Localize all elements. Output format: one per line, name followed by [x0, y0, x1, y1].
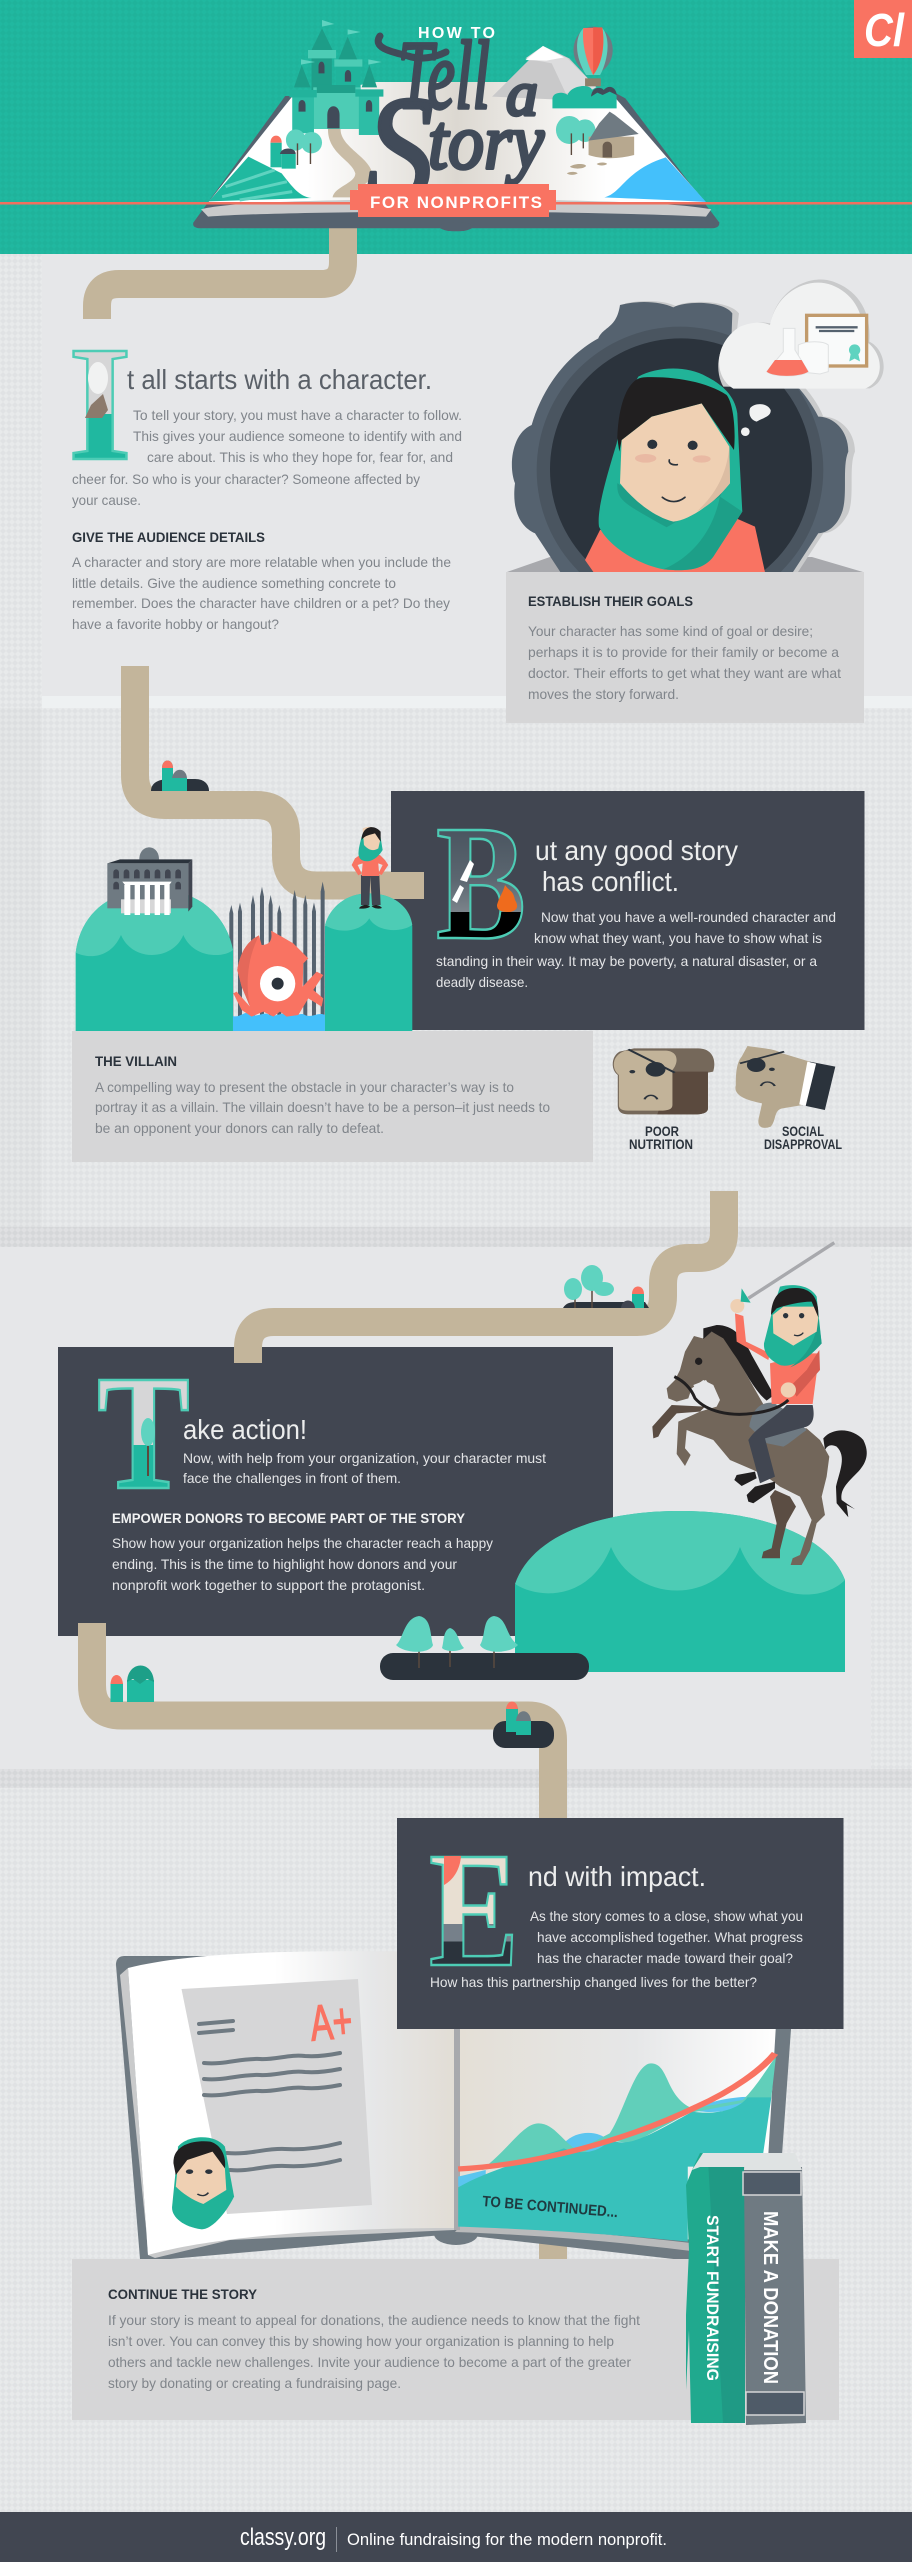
title: story: S [366, 65, 434, 233]
goals heading: ESTABLISH THEIR GOALS [528, 594, 693, 609]
book cover [193, 93, 719, 228]
label: poor nutrition: POOR [645, 1124, 679, 1139]
section 1: character [68, 312, 462, 632]
title: a: a [506, 58, 538, 129]
book cover [116, 1956, 791, 2262]
header illustration: open storybook [193, 20, 719, 231]
eyes [647, 440, 698, 450]
road: section 1 to conflict [135, 666, 424, 886]
action body: ending. This is the time to highlight how donors and your [112, 1556, 457, 1572]
label: social disapproval [764, 1124, 842, 1152]
rider torso [770, 1353, 819, 1404]
conflict body: standing in their way. It may be poverty, a natural disaster, or a [436, 953, 817, 969]
drop cap I: I [68, 312, 132, 495]
to be continued: TO BE CONTINUED... [482, 2193, 619, 2221]
scenery on road: trees and tower [563, 1265, 649, 1308]
portrait of character in mirror frame [512, 301, 855, 572]
panel: continue the story [72, 2259, 839, 2420]
spine [454, 1990, 460, 2230]
knob [434, 2223, 478, 2245]
rider leg [748, 1405, 814, 1483]
spears [229, 882, 325, 1017]
book pages [208, 82, 706, 203]
conflict text [436, 791, 836, 990]
road: action to impact [92, 1623, 553, 1818]
trees left [286, 129, 322, 165]
impact heading: nd with impact. [528, 1861, 706, 1892]
goals text: Your character has some kind of goal or desire; [528, 623, 813, 639]
icon: villain bread [613, 1048, 714, 1114]
certificate [805, 314, 868, 368]
panel: the villain [72, 1031, 593, 1162]
report paper [182, 1979, 372, 2214]
villain text: be an opponent your donors can rally to defeat. [95, 1120, 384, 1136]
logo badge: Cl [864, 4, 905, 56]
castle [289, 20, 383, 135]
hijab [599, 369, 742, 570]
hijab shade [663, 497, 742, 570]
icon: villain thumbs down [735, 1046, 835, 1128]
continue heading: CONTINUE THE STORY [108, 2287, 257, 2302]
mirror [550, 338, 812, 570]
footer [0, 2512, 912, 2562]
continue text: story by donating or creating a fundraising page. [108, 2375, 401, 2391]
blue areas [458, 2097, 771, 2187]
title: tell: Tell [398, 22, 490, 130]
header band [0, 0, 912, 254]
frame inner ring [536, 326, 824, 572]
title swash [378, 36, 446, 58]
footer tagline: Online fundraising for the modern nonprofit. [347, 2530, 667, 2549]
page edge [201, 199, 711, 217]
goals text: moves the story forward. [528, 686, 679, 702]
cloud [719, 283, 880, 389]
rider hijab [764, 1285, 822, 1366]
frame shadow [624, 301, 855, 572]
banner: for nonprofits: FOR NONPROFITS [370, 193, 542, 212]
hill left [76, 889, 233, 1031]
villain text: portray it as a villain. The villain doesn’t have to be a person–it just needs to [95, 1099, 550, 1115]
hot air balloon [573, 27, 613, 86]
drop cap T: T [97, 1341, 190, 1524]
flask [767, 328, 808, 376]
stepping stones [567, 162, 607, 175]
boots [734, 1472, 775, 1503]
area chart [458, 2053, 776, 2242]
impact body [430, 1908, 803, 1990]
details text [72, 554, 451, 632]
thought cloud: goals [718, 280, 884, 389]
winding road [328, 128, 372, 197]
mountain [492, 46, 597, 99]
banner: for nonprofits [350, 184, 556, 217]
details text: have a favorite hobby or hangout? [72, 616, 279, 632]
grade: A+ [308, 1992, 355, 2052]
intro text: your cause. [72, 492, 141, 508]
action intro [183, 1450, 546, 1486]
hill right [325, 893, 412, 1031]
right page [460, 1990, 778, 2240]
reins [674, 1377, 788, 1414]
conflict body [436, 909, 836, 990]
beaker [798, 342, 828, 374]
left page [128, 1951, 454, 2255]
details text: remember. Does the character have children or a pet? Do they [72, 595, 450, 611]
label: social disapproval: SOCIAL [782, 1124, 824, 1139]
drop cap E: E [429, 1818, 519, 2001]
intro text: To tell your story, you must have a character to follow. [133, 407, 462, 423]
hut [589, 112, 639, 158]
panel: end with impact [397, 1818, 844, 2029]
lake [604, 157, 706, 202]
title lettering: tory [428, 98, 544, 185]
footer brand: classy.org [240, 2524, 326, 2551]
details text: A character and story are more relatable when you include the [72, 554, 451, 570]
small tower [270, 136, 296, 169]
horse body [667, 1332, 829, 1565]
horse far legs [652, 1405, 705, 1438]
cloud shadow [718, 280, 884, 388]
small towers left [110, 1666, 154, 1702]
villain text: A compelling way to present the obstacle in your character’s way is to [95, 1079, 514, 1095]
impact body: has the character made toward their goal? [537, 1950, 793, 1966]
conflict body: know what they want, you have to show what is [534, 930, 822, 946]
title lettering [366, 22, 544, 233]
action subheading: EMPOWER DONORS TO BECOME PART OF THE STORY [112, 1511, 465, 1526]
page bottom edge [455, 2226, 700, 2252]
impact text [429, 1818, 803, 2001]
panel: conflict [391, 791, 864, 1030]
dark rocks [591, 87, 617, 97]
panel: take action [58, 1347, 613, 1636]
impact body: As the story comes to a close, show what you [530, 1908, 803, 1924]
frame [512, 302, 848, 577]
intro text: This gives your audience someone to identify with and [133, 428, 462, 444]
path segment over panel [391, 872, 424, 899]
big hill [515, 1511, 845, 1672]
subheading: details: GIVE THE AUDIENCE DETAILS [72, 530, 265, 545]
goals text [528, 623, 841, 702]
sword [748, 1243, 834, 1298]
label: poor nutrition [629, 1124, 693, 1152]
saddle [749, 1403, 807, 1447]
continue text: If your story is meant to appeal for donations, the audience needs to know that the fight [108, 2312, 640, 2328]
book bands [743, 2172, 804, 2415]
water [233, 1013, 325, 1031]
continue text: others and tackle new challenges. Invite your audience to become a part of the greater [108, 2354, 631, 2370]
government building [107, 847, 192, 915]
conflict body: deadly disease. [436, 974, 528, 990]
hair [617, 377, 735, 452]
road: header to character section [97, 225, 343, 319]
action heading: ake action! [183, 1414, 307, 1445]
label: poor nutrition: NUTRITION [629, 1137, 693, 1152]
red horizon line [0, 202, 912, 204]
villain heading: THE VILLAIN [95, 1054, 177, 1069]
impact body: have accomplished together. What progress [537, 1929, 803, 1945]
intro text: cheer for. So who is your character? Someone affected by [72, 471, 420, 487]
conflict scene [76, 827, 412, 1031]
road behind book [539, 2238, 567, 2262]
continue text: isn’t over. You can convey this by showing how your organization is planning to help [108, 2333, 614, 2349]
horse tail [823, 1430, 867, 1517]
road: conflict to action [248, 1191, 724, 1363]
book spine knob [439, 222, 473, 231]
dark ground with trees [380, 1616, 589, 1680]
villain text [95, 1079, 550, 1136]
hands [781, 1382, 796, 1398]
striped hill [209, 157, 312, 201]
green book: start fundraising: START FUNDRAISING [703, 2215, 722, 2381]
intro text [72, 407, 462, 508]
closing book illustration [116, 1951, 791, 2262]
scribbled lines [199, 2021, 340, 2170]
intro text: care about. This is who they hope for, fear for, and [147, 449, 453, 465]
conflict text: has conflict. [542, 866, 679, 897]
face [620, 403, 730, 522]
nose and smile [662, 460, 685, 502]
horse mane [703, 1325, 774, 1401]
trees right [556, 116, 596, 155]
goals text: doctor. Their efforts to get what they want are what [528, 665, 841, 681]
action body: Show how your organization helps the character reach a happy [112, 1535, 493, 1551]
continue text [108, 2312, 640, 2391]
bushes [552, 86, 617, 108]
panel: establish their goals [506, 557, 864, 723]
action body [112, 1535, 493, 1593]
details text: little details. Give the audience something concrete to [72, 575, 396, 591]
title: how to: HOW TO [418, 25, 495, 42]
green book: start fundraising [686, 2153, 745, 2423]
shirt [585, 519, 765, 572]
growth line [458, 2053, 775, 2169]
green peaks [481, 2057, 776, 2170]
label: social disapproval: DISAPPROVAL [764, 1137, 842, 1152]
small tower with rock [493, 1702, 554, 1748]
octopus [233, 931, 323, 1017]
character standing [352, 827, 388, 909]
heading: t all starts with a character. [127, 364, 432, 395]
conflict body: Now that you have a well-rounded character and [541, 909, 836, 925]
action intro: face the challenges in front of them. [183, 1470, 401, 1486]
goals text: perhaps it is to provide for their family or become a [528, 644, 839, 660]
rider face [773, 1307, 818, 1346]
grey book: make a donation: MAKE A DONATION [759, 2211, 781, 2384]
thought bubbles [741, 404, 771, 436]
drop cap B: B [436, 791, 526, 974]
cheeks [635, 454, 711, 463]
grey book: make a donation [743, 2153, 806, 2425]
small tower scenery [151, 760, 209, 791]
rider on rearing horse [652, 1243, 867, 1565]
character head [172, 2137, 234, 2229]
left page edge [120, 1968, 454, 2258]
conflict heading: ut any good story [535, 835, 738, 866]
action body: nonprofit work together to support the protagonist. [112, 1577, 425, 1593]
teal area [458, 2097, 771, 2242]
impact body: How has this partnership changed lives for the better? [430, 1974, 757, 1990]
action text [97, 1341, 546, 1593]
action intro: Now, with help from your organization, your character must [183, 1450, 546, 1466]
